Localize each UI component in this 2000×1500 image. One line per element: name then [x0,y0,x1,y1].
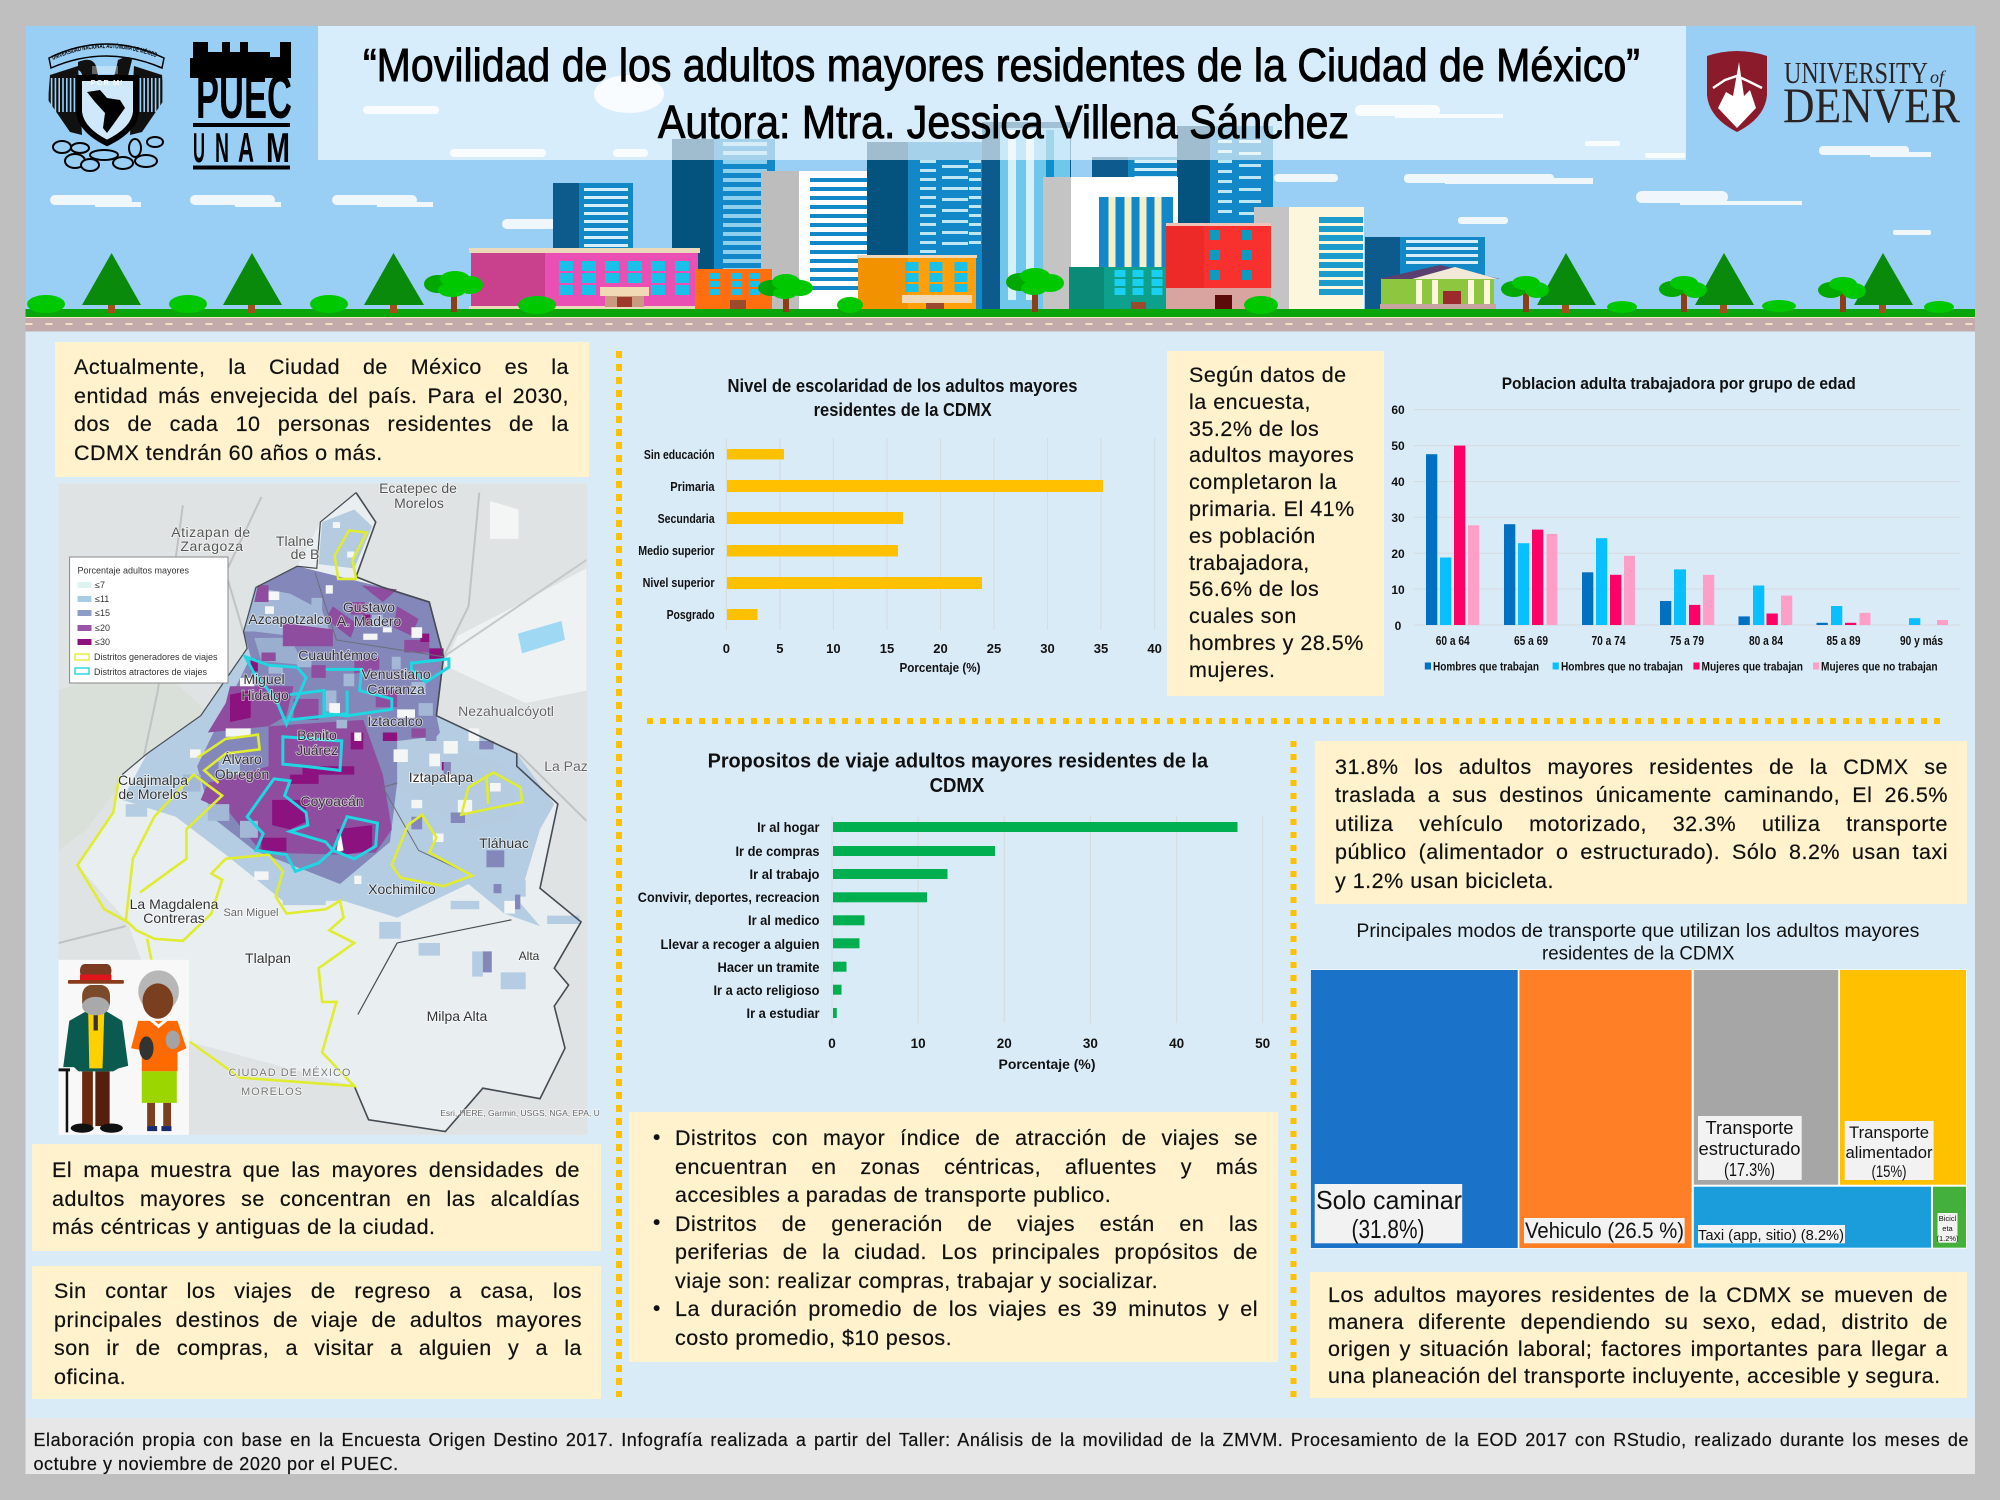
map legend: Distritos generadores de viajes [94,652,218,662]
category labels: Ir al trabajo [750,867,820,882]
chart title: Principales modos de transporte que utilizan los adultos mayores [1356,921,1919,942]
title [363,39,1640,148]
logo: PUEC UNAM: N [215,124,229,171]
map legend: Porcentaje adultos mayores [78,566,190,576]
text: densidades en el mapa: adultos mayores se concentran en las alcaldías [52,1186,580,1210]
map labels: Nezahualcóyotl [458,703,554,719]
chart title [728,376,1078,420]
y axis labels: 10 [1391,583,1405,597]
text: datos de la encuesta: mujeres. [1189,658,1275,682]
text: datos de la encuesta: Según datos de [1189,363,1347,387]
central blue tower [867,142,983,310]
chart title: residentes de la CDMX [1542,944,1735,964]
map labels: Coyoacán [300,793,364,809]
logo: UNAM crest [48,42,165,172]
text: envejecimiento: dos de cada 10 personas residentes de la [74,412,569,436]
chart title: residentes de la CDMX [814,400,992,420]
text: datos de la encuesta: adultos mayores [1189,443,1354,467]
ground grass [26,309,1975,317]
axis: 20 [933,641,948,656]
category labels: Hacer un tramite [718,960,820,975]
hombres que trabajan bars [1426,454,1828,625]
category labels: Primaria [670,479,715,494]
y axis labels: 60 [1391,403,1405,417]
age group labels: 80 a 84 [1749,634,1783,648]
white building two [1043,177,1178,310]
text: modos de transporte: traslada a sus destinos únicamente caminando, El 26.5% [1335,783,1948,807]
map legend: ≤7 [95,580,105,590]
logo: University of Denver [1707,51,1961,133]
text: hallazgos con viñetas: costo promedio, $10 pesos. [675,1326,952,1350]
map labels: Iztacalco [367,713,423,729]
back left tower [553,183,633,253]
text: hallazgos con viñetas [629,1112,1278,1362]
axis: Porcentaje (%) [900,660,980,675]
tile: bicicleta: Bicicl [1939,1214,1957,1223]
text: hallazgos con viñetas: periferias de la ciudad. Los principales propósitos de [675,1240,1258,1264]
axis: 30 [1083,1036,1098,1051]
tile: transporte estructurado [1694,970,1838,1185]
crest wings [48,66,82,135]
age group labels: 90 y más [1900,634,1943,648]
map legend: ≤15 [95,608,110,618]
map labels: A. Madero [337,613,402,629]
age group labels: 70 a 74 [1592,634,1626,648]
map labels: Zaragoza [180,538,244,554]
footer band [26,1418,1975,1474]
pink school [469,248,700,312]
small orange building [695,269,772,309]
chart: propositos de viaje [638,750,1270,1072]
map labels: Alta [519,949,540,963]
header: city skyline illustration [26,26,1975,332]
tile: transporte alimentador: (15%) [1872,1162,1906,1181]
text: hallazgos con viñetas: accesibles a paradas de transporte publico. [675,1183,1111,1207]
category labels: Ir a acto religioso [714,983,820,998]
map labels: CIUDAD DE MÉXICO [229,1066,351,1079]
category labels: Nivel superior [643,575,715,590]
map labels: de Morelos [118,786,188,802]
map labels: Benito [297,727,337,743]
tile: taxi [1694,1187,1931,1248]
title backing panel [318,26,1686,160]
map labels: Ecatepec de [379,480,457,496]
chart title: Nivel de escolaridad de los adultos mayores [728,376,1078,396]
axis: 30 [1040,641,1055,656]
footer text: Elaboración propia con base en la Encuesta Origen Destino 2017. Infografía realizada a partir del Taller: Análisis de la movilidad de la ZMVM. Procesamiento de la EOD 2017 con RStudio, realizado durante los meses de [34,1430,1969,1450]
axis: 20 [997,1036,1012,1051]
category labels: Secundaria [658,511,715,526]
text: hallazgos con viñetas: encuentran en zonas céntricas, afluentes y más [675,1154,1258,1178]
logo: PUEC UNAM: A [238,124,254,171]
hombres que no trabajan bars [1440,538,1920,625]
map labels: de B [291,546,319,562]
map legend: ≤30 [95,637,110,647]
text: envejecimiento [55,342,589,477]
tall blue tower [672,139,775,309]
chart title: Propositos de viaje adultos mayores residentes de la [708,750,1209,772]
dashed dividers [619,351,1943,1397]
legend [1425,660,1938,674]
map labels: Morelos [394,495,444,511]
category labels: Sin educación [644,447,715,462]
text: datos de la encuesta: 56.6% de los [1189,577,1319,601]
y axis labels: 40 [1391,475,1405,489]
orange school [857,255,977,313]
text: hallazgos con viñetas: viaje son: realizar compras, trabajar y socializar. [675,1268,1158,1292]
legend: Mujeres que trabajan [1702,660,1803,674]
text: datos de la encuesta [1167,351,1384,696]
logo: University of Denver: DENVER [1783,77,1961,133]
axis: 40 [1147,641,1162,656]
text: datos de la encuesta: primaria. El 41% [1189,497,1355,521]
axis: 0 [723,641,730,656]
text: modos de transporte: y 1.2% usan bicicleta. [1335,869,1554,893]
chart: poblacion adulta trabajadora [1391,374,1960,674]
logo: University of Denver: UNIVERSITY [1784,55,1928,90]
tile: transporte estructurado: (17.3%) [1724,1160,1775,1180]
text: densidades en el mapa: más céntricas y antiguas de la ciudad. [52,1215,436,1239]
category labels: Ir de compras [736,844,820,859]
axis: 10 [826,641,841,656]
legend: Hombres que trabajan [1433,660,1539,674]
map labels: Azcapotzalco [248,611,332,627]
axis: 10 [911,1036,926,1051]
y axis labels: 20 [1391,547,1405,561]
text: destinos de viaje [32,1266,601,1399]
y axis labels: 50 [1391,439,1405,453]
category labels: Posgrado [667,607,715,622]
teal building [1066,267,1176,312]
category labels: Ir al hogar [757,820,820,835]
treemap: modos de transporte [1310,921,1967,1248]
text: hallazgos con viñetas: • [653,1211,661,1234]
text: destinos de viaje: son ir de compras, a visitar a alguien y a la [54,1336,582,1360]
mujeres que no trabajan bars [1468,525,1948,625]
map labels: Esri, HERE, Garmin, USGS, NGA, EPA, U [440,1108,600,1118]
axis: 35 [1094,641,1108,656]
map legend: Distritos atractores de viajes [94,667,208,677]
logo: PUEC UNAM: U [193,124,205,171]
category labels [638,820,820,1021]
text: modos de transporte: utiliza vehículo motorizado, 32.3% utiliza transporte [1335,812,1948,836]
pine trees [82,253,1913,313]
sky clouds [50,75,1931,235]
logo: University of Denver: of [1930,67,1947,87]
text: conclusión: manera diferente dependiendo su sexo, edad, distrito de [1328,1310,1948,1334]
tile: vehiculo: Vehiculo (26.5 %) [1525,1218,1684,1243]
text: datos de la encuesta: cuales son [1189,604,1297,628]
light striped tower [982,122,1071,312]
text: envejecimiento: CDMX tendrán 60 años o más. [74,440,383,464]
text: conclusión: origen y situación laboral; factores importantes para llegar a [1328,1337,1948,1361]
footer text [34,1430,1969,1474]
map labels: Tlalne [276,533,314,549]
axis [723,641,1162,675]
text: modos de transporte [1315,741,1967,904]
text: conclusión [1310,1272,1967,1398]
tile: transporte alimentador: alimentador [1846,1143,1933,1162]
map labels: Hidalgo [241,687,289,703]
y axis labels [1391,403,1405,633]
map legend: ≤11 [95,594,109,604]
tile: taxi: Taxi (app, sitio) (8.2%) [1698,1227,1844,1244]
back right towers [1092,126,1273,236]
text: hallazgos con viñetas: Distritos de generación de viajes están en las [675,1212,1258,1236]
map labels: Gustavo [343,599,395,615]
bushes [27,295,1954,314]
white striped building [761,171,878,309]
text: densidades en el mapa: El mapa muestra que las mayores densidades de [52,1158,580,1182]
bars [833,822,1238,1018]
axis: 15 [880,641,894,656]
legend: Hombres que no trabajan [1561,660,1683,674]
map labels: La Paz [544,758,588,774]
axis: 5 [776,641,784,656]
cream striped building [1254,207,1364,309]
map of Mexico City [59,480,600,1135]
crest nopal [53,137,163,171]
footer text: octubre y noviembre de 2020 por el PUEC. [34,1454,399,1474]
category labels: Ir a estudiar [746,1006,820,1021]
logo: PUEC UNAM: M [266,124,290,171]
text: hallazgos con viñetas: Distritos con mayor índice de atracción de viajes se [675,1126,1258,1150]
text: densidades en el mapa [32,1144,601,1251]
tile: transporte alimentador: Transporte [1849,1123,1929,1142]
map labels: Xochimilco [368,881,436,897]
tile: solo caminar: Solo caminar [1316,1185,1462,1215]
tile: transporte alimentador [1840,970,1966,1185]
text: envejecimiento: entidad más envejecida del país. Para el 2030, [74,384,569,408]
logo: UNAM crest: UNIVERSIDAD NACIONAL AUTÓNOMA DE MÉXICO [52,42,157,60]
map labels: La Magdalena [130,896,219,912]
axis [828,1036,1270,1072]
category labels: Convivir, deportes, recreacion [638,890,820,905]
map labels: Contreras [143,910,205,926]
category labels [638,447,715,622]
tile: bicicleta: (1.2%) [1936,1234,1959,1243]
axis: 0 [828,1036,836,1051]
category labels: Llevar a recoger a alguien [660,937,820,952]
low blue building [1365,237,1485,309]
map labels: Milpa Alta [427,1008,488,1024]
chart title: Poblacion adulta trabajadora por grupo de edad [1502,374,1856,393]
text: conclusión: una planeación del transporte incluyente, accesible y segura. [1328,1364,1941,1388]
crest eagle and condor [78,57,132,84]
category labels: Medio superior [638,543,715,558]
text: modos de transporte: 31.8% los adultos mayores residentes de la CDMX se [1335,755,1948,779]
road [26,317,1975,332]
text: destinos de viaje: Sin contar los viajes de regreso a casa, los [54,1279,582,1303]
title: “Movilidad de los adultos mayores residentes de la Ciudad de México” [363,39,1640,91]
chart: nivel de escolaridad [638,376,1162,675]
map labels: Iztapalapa [409,769,474,785]
text: hallazgos con viñetas: • [653,1297,661,1320]
red building [1166,223,1271,310]
age group labels: 85 a 89 [1826,634,1861,648]
map labels: San Miguel [223,907,279,919]
text: hallazgos con viñetas: La duración promedio de los viajes es 39 minutos y el [675,1297,1258,1321]
age group labels: 65 a 69 [1514,634,1548,648]
crest shield [79,78,136,143]
axis: 25 [987,641,1001,656]
tile: solo caminar [1311,970,1518,1248]
map labels: MORELOS [241,1086,303,1098]
chart title [1356,921,1919,964]
logo: PUEC UNAM: PUEC [196,63,292,132]
map legend: ≤20 [95,623,110,633]
text: datos de la encuesta: completaron la [1189,470,1337,494]
axis: Porcentaje (%) [998,1057,1096,1072]
map labels: Cuajimalpa [118,772,188,788]
green house [1378,265,1500,312]
map legend [70,557,228,683]
text: datos de la encuesta: trabajadora, [1189,551,1310,575]
text: hallazgos con viñetas: • [653,1126,661,1149]
text: modos de transporte: público (alimentador o estructurado). Sólo 8.2% usan taxi [1335,840,1948,864]
map labels [118,480,600,1118]
text: conclusión: Los adultos mayores residentes de la CDMX se mueven de [1328,1283,1948,1307]
map labels: Obregón [215,766,269,782]
logo: UNAM crest: POR MI [91,78,123,87]
tile: solo caminar: (31.8%) [1352,1214,1424,1244]
text: envejecimiento: Actualmente, la Ciudad de México es la [74,355,569,379]
tile: transporte estructurado: Transporte [1706,1118,1794,1138]
chart title: CDMX [930,775,985,797]
axis: 50 [1255,1036,1270,1051]
tile: bicicleta [1933,1187,1966,1248]
title: Autora: Mtra. Jessica Villena Sánchez [658,96,1349,148]
round trees [424,268,1866,312]
map labels: Juárez [296,742,338,758]
category labels: Ir al medico [748,913,820,928]
y axis labels: 30 [1391,511,1405,525]
logo: PUEC UNAM [190,42,292,171]
text: destinos de viaje: oficina. [54,1364,126,1388]
map labels: Tlalpan [245,950,291,966]
age group labels: 75 a 79 [1670,634,1704,648]
map labels: Venustiano [361,666,431,682]
map labels: Cuauhtémoc [298,647,378,663]
y axis labels: 0 [1395,619,1402,633]
mujeres que trabajan bars [1454,446,1856,625]
text: datos de la encuesta: es población [1189,524,1316,548]
text: datos de la encuesta: 35.2% de los [1189,417,1319,441]
text: destinos de viaje: principales destinos de viaje de adultos mayores [54,1308,582,1332]
elderly couple illustration [59,960,189,1135]
chart title [708,750,1209,797]
map labels: Carranza [367,681,425,697]
tile: bicicleta: eta [1942,1224,1954,1233]
map labels: Tláhuac [479,835,529,851]
age group labels: 60 a 64 [1436,634,1470,648]
age group labels [1436,634,1943,648]
tile: transporte estructurado: estructurado [1698,1139,1800,1159]
crest ribbon [49,44,164,68]
bars [727,449,1103,620]
axis: 40 [1169,1036,1184,1051]
tile: vehiculo [1519,970,1692,1248]
map labels: Atizapan de [171,524,251,540]
map labels: Miguel [243,671,285,687]
map labels: Álvaro [222,751,262,767]
text: datos de la encuesta: la encuesta, [1189,390,1311,414]
text: datos de la encuesta: hombres y 28.5% [1189,631,1364,655]
legend: Mujeres que no trabajan [1821,660,1938,674]
